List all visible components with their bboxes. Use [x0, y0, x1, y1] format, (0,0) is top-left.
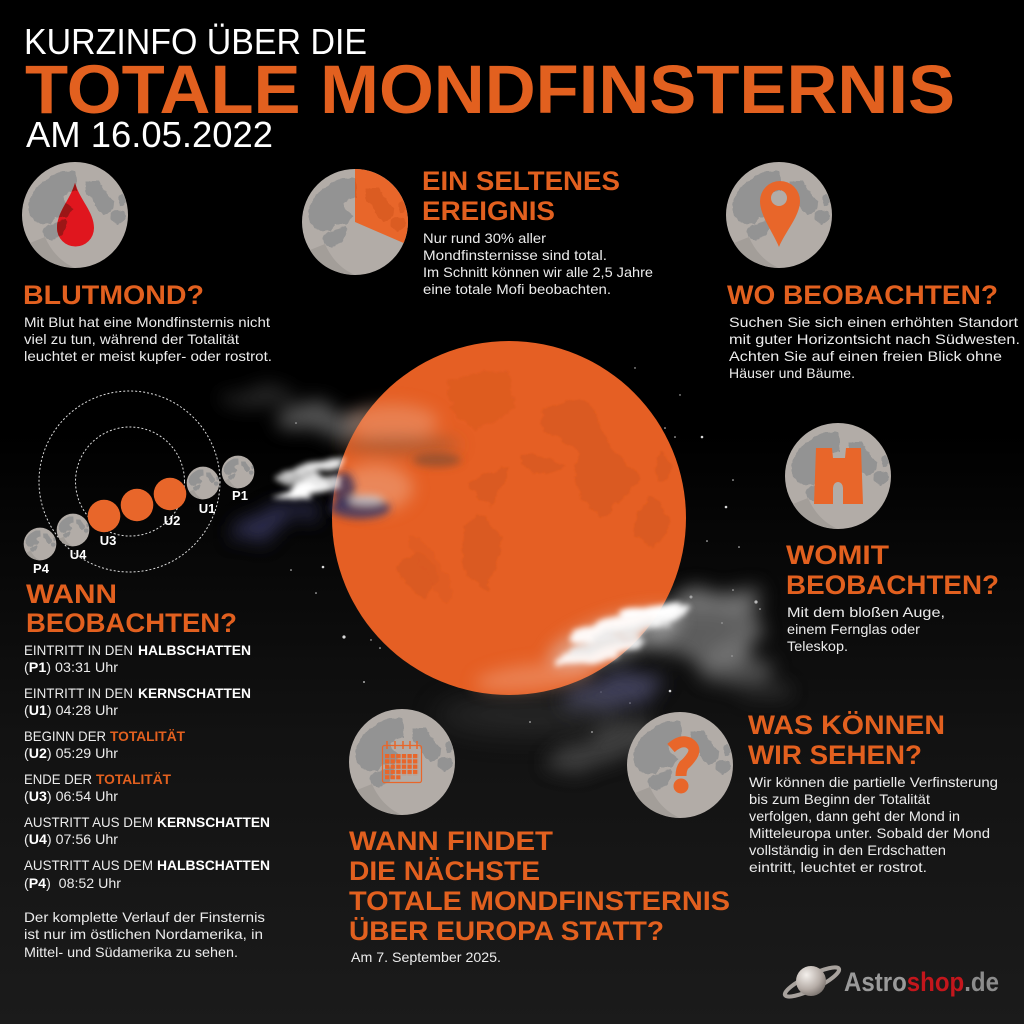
panel: Wann beobachten: TOTALITÄT	[96, 771, 171, 787]
icon: pie chart moon 30 percent	[302, 169, 408, 275]
panel: Was koennen wir sehen: Mitteleuropa unter. Sobald der Mond	[749, 825, 990, 841]
panel: Wann beobachten: EINTRITT IN DEN	[24, 642, 133, 658]
panel: Wo beobachten: Suchen Sie sich einen erhöhten Standort	[729, 314, 1018, 330]
icon: blood drop moon	[22, 162, 128, 268]
diagram labels: U1	[199, 501, 215, 516]
clouds behind the moon	[220, 389, 797, 778]
panel: Wann beobachten: EINTRITT IN DEN	[24, 685, 133, 701]
panel: Wann beobachten: Der komplette Verlauf der Finsternis	[24, 909, 265, 925]
panel: Wann beobachten: (U1) 04:28 Uhr	[24, 702, 118, 718]
logo: Astroshop.de	[782, 963, 999, 1001]
panel: Wann findet die naechste: ÜBER EUROPA STATT?	[349, 916, 664, 946]
panel: Wann beobachten: (P4) 08:52 Uhr	[24, 875, 121, 891]
panel: Was koennen wir sehen: WAS KÖNNEN	[748, 710, 945, 740]
panel: Wann findet die naechste: WANN FINDET	[349, 826, 554, 856]
panel: Was koennen wir sehen: eintritt, leuchtet er rostrot.	[749, 859, 927, 875]
panel: Ein seltenes Ereignis: EREIGNIS	[422, 196, 555, 226]
panel: Wann findet die naechste	[349, 826, 730, 965]
icon: question mark moon	[627, 712, 733, 818]
panel: Wann findet die naechste: TOTALE MONDFINSTERNIS	[349, 886, 730, 916]
panel: Wo beobachten: WO BEOBACHTEN?	[727, 280, 998, 310]
panel: Wann beobachten: (U4) 07:56 Uhr	[24, 831, 118, 847]
panel: Wann beobachten: Mittel- und Südamerika zu sehen.	[24, 944, 238, 960]
eclipse diagram	[24, 391, 254, 576]
moon U4	[57, 514, 89, 546]
panel: Wo beobachten: Häuser und Bäume.	[729, 365, 855, 381]
panel: Womit beobachten: Teleskop.	[787, 638, 848, 654]
panel: Was koennen wir sehen: Wir können die partielle Verfinsterung	[749, 774, 998, 790]
big eclipsed moon	[332, 341, 686, 695]
logo: Astroshop.de: Astroshop.de	[844, 967, 999, 997]
moon totality	[121, 489, 153, 521]
panel: Ein seltenes Ereignis	[422, 166, 653, 297]
moon P1	[222, 456, 254, 488]
panel: Wann beobachten: ist nur im östlichen Nordamerika, in	[24, 926, 263, 942]
clouds over the moon	[272, 404, 689, 696]
diagram labels: P4	[33, 561, 50, 576]
icon: location pin moon	[726, 162, 832, 268]
panel: Wann beobachten: AUSTRITT AUS DEM	[24, 857, 153, 873]
panel: Blutmond: leuchtet er meist kupfer- oder rostrot.	[24, 348, 272, 364]
title: AM 16.05.2022	[26, 114, 273, 155]
diagram labels: P1	[232, 488, 248, 503]
panel: Ein seltenes Ereignis: EIN SELTENES	[422, 166, 620, 196]
panel: Wann beobachten: AUSTRITT AUS DEM	[24, 814, 153, 830]
panel: Blutmond: viel zu tun, während der Totalität	[24, 331, 239, 347]
title: TOTALE MONDFINSTERNIS	[25, 51, 955, 128]
panel: Wann beobachten: (U2) 05:29 Uhr	[24, 745, 118, 761]
panel: Wann beobachten: BEOBACHTEN?	[26, 608, 237, 638]
panel: Womit beobachten: einem Fernglas oder	[787, 621, 920, 637]
panel: Wann beobachten: KERNSCHATTEN	[157, 814, 270, 830]
diagram labels	[33, 488, 248, 576]
moon maria	[398, 372, 669, 603]
panel: Wann beobachten	[24, 579, 270, 960]
panel: Wann findet die naechste: DIE NÄCHSTE	[349, 856, 540, 886]
panel: Was koennen wir sehen: verfolgen, dann geht der Mond in	[749, 808, 960, 824]
panel: Wo beobachten	[727, 280, 1020, 381]
panel: Womit beobachten: Mit dem bloßen Auge,	[787, 604, 945, 620]
moon U2	[154, 478, 186, 510]
panel: Wann beobachten: WANN	[26, 579, 117, 609]
panel: Ein seltenes Ereignis: Mondfinsternisse sind total.	[423, 247, 607, 263]
diagram labels: U3	[100, 533, 116, 548]
moon P4	[24, 528, 56, 560]
panel: Ein seltenes Ereignis: Im Schnitt können wir alle 2,5 Jahre	[423, 264, 653, 280]
stars	[290, 367, 761, 733]
panel: Blutmond	[23, 280, 272, 364]
panel: Wann beobachten: TOTALITÄT	[110, 728, 185, 744]
panel: Wo beobachten: mit guter Horizontsicht nach Südwesten.	[729, 331, 1020, 347]
moon U1	[187, 467, 219, 499]
panel: Wann beobachten: (U3) 06:54 Uhr	[24, 788, 118, 804]
panel: Wann findet die naechste: Am 7. September 2025.	[351, 949, 501, 965]
panel: Was koennen wir sehen: bis zum Beginn der Totalität	[749, 791, 930, 807]
diagram labels: U4	[70, 547, 87, 562]
panel: Wann beobachten: BEGINN DER	[24, 728, 106, 744]
panel: Was koennen wir sehen	[748, 710, 998, 875]
panel: Wann beobachten: (P1) 03:31 Uhr	[24, 659, 118, 675]
icon: calendar moon	[349, 709, 455, 815]
panel: Wann beobachten: HALBSCHATTEN	[138, 642, 251, 658]
icon: binocular shape moon	[785, 423, 891, 529]
diagram labels: U2	[164, 513, 180, 528]
panel: Womit beobachten: WOMIT	[786, 540, 890, 570]
title	[24, 21, 955, 155]
panel: Wann beobachten: KERNSCHATTEN	[138, 685, 251, 701]
panel: Ein seltenes Ereignis: Nur rund 30% aller	[423, 230, 546, 246]
panel: Womit beobachten: BEOBACHTEN?	[786, 570, 999, 600]
panel: Womit beobachten	[786, 540, 999, 654]
panel: Wo beobachten: Achten Sie auf einen freien Blick ohne	[729, 348, 1002, 364]
panel: Ein seltenes Ereignis: eine totale Mofi beobachten.	[423, 281, 611, 297]
panel: Was koennen wir sehen: WIR SEHEN?	[748, 740, 922, 770]
panel: Was koennen wir sehen: vollständig in den Erdschatten	[749, 842, 946, 858]
panel: Wann beobachten: HALBSCHATTEN	[157, 857, 270, 873]
panel: Blutmond: BLUTMOND?	[23, 280, 204, 310]
moon U3	[88, 500, 120, 532]
panel: Blutmond: Mit Blut hat eine Mondfinsternis nicht	[24, 314, 270, 330]
title: KURZINFO ÜBER DIE	[24, 21, 367, 62]
panel: Wann beobachten: ENDE DER	[24, 771, 92, 787]
